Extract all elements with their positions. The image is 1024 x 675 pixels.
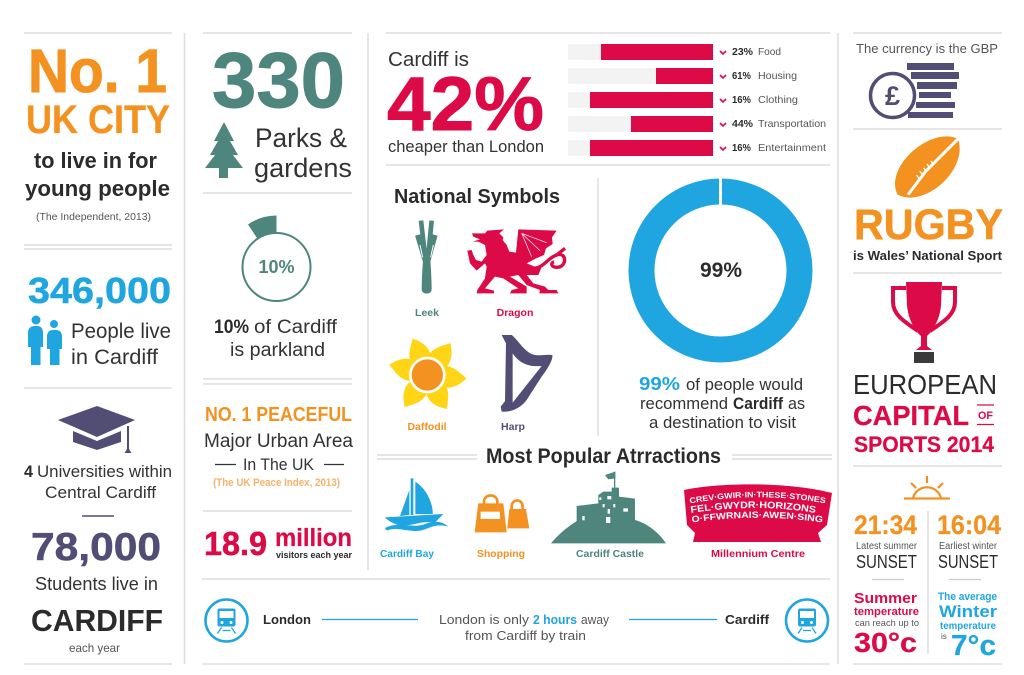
icon: dragon	[467, 229, 565, 293]
icon: pound coins	[870, 63, 959, 118]
bar chart: cost categories: Transportation	[758, 118, 826, 130]
text: is parkland: is parkland	[230, 340, 325, 361]
stat: summer sunset: SUNSET	[856, 552, 917, 572]
bar chart: cost categories: Food	[758, 46, 781, 58]
icon: Millennium Centre banner: CREV·GWIR·IN·THESE·STONES	[690, 492, 826, 503]
stat: winter temperature: Winter	[939, 602, 997, 621]
text: Central Cardiff: Central Cardiff	[45, 483, 156, 502]
number: 42%: 42%	[387, 62, 544, 147]
bar chart: cost categories: 23%	[732, 47, 753, 58]
label: Cardiff Bay: Cardiff Bay	[380, 548, 434, 560]
text: In The UK: In The UK	[243, 455, 315, 474]
heading: Most Popular Atrractions: Most Popular Atrractions	[486, 445, 721, 468]
panel: population	[28, 270, 171, 369]
icon: trophy	[893, 282, 955, 363]
label: Leek: Leek	[415, 307, 439, 319]
bar chart: cost categories: 16%	[732, 143, 751, 154]
panel: universities and students	[24, 406, 172, 655]
text: currency: The currency is the GBP	[856, 41, 998, 56]
panel: attractions	[380, 445, 832, 560]
label: Cardiff Castle: Cardiff Castle	[576, 548, 644, 560]
text: 10% of Cardiff	[214, 317, 338, 338]
stat: winter sunset: SUNSET	[938, 552, 998, 572]
panel: parks	[205, 36, 352, 183]
text: 99% of people would	[639, 374, 803, 394]
label: Shopping: Shopping	[477, 548, 525, 560]
text: young people: young people	[25, 176, 170, 201]
chart: 10 percent ring	[242, 216, 310, 301]
panel: No. 1 UK city	[25, 37, 170, 223]
heading: No. 1: No. 1	[28, 37, 167, 105]
text: recommend Cardiff as	[640, 394, 805, 413]
panel: capital of sports	[853, 282, 997, 457]
icon: Millennium Centre banner	[684, 484, 832, 542]
text: OF	[977, 405, 994, 424]
bar chart: cost categories: 44%	[732, 119, 753, 130]
text: CAPITAL: CAPITAL	[853, 400, 969, 431]
icon: sun	[904, 476, 950, 498]
chart: 10 percent ring: 10%	[258, 257, 295, 277]
stat: summer temperature: Summer	[854, 590, 917, 607]
icon: train Cardiff	[786, 600, 828, 642]
text: People live: People live	[71, 320, 171, 343]
stat: winter sunset: Earliest winter	[939, 541, 998, 552]
panel: national symbols	[387, 186, 565, 433]
stat: winter sunset	[937, 510, 1001, 572]
text: each year: each year	[69, 641, 120, 655]
stat: winter temperature: is	[941, 632, 947, 641]
text: Cardiff is: Cardiff is	[388, 49, 469, 71]
text: recommend Cardiff as: Cardiff	[733, 394, 783, 413]
panel: rugby	[853, 124, 1003, 263]
stat: winter sunset: 16:04	[937, 510, 1001, 540]
label: Millennium Centre: Millennium Centre	[711, 548, 805, 560]
bar chart: cost categories: 61%	[732, 71, 751, 82]
text: national sport: is Wales’ National Sport	[853, 249, 1003, 263]
text: SPORTS 2014: SPORTS 2014	[854, 432, 995, 457]
label: Daffodil: Daffodil	[407, 421, 447, 433]
panel: currency	[856, 41, 998, 118]
panel: recommendation	[639, 176, 805, 432]
text: 99% of people would: 99%	[639, 374, 680, 394]
stat: summer sunset: Latest summer	[856, 541, 918, 552]
icon: boat	[385, 478, 448, 531]
text: train time: 2 hours	[533, 612, 577, 627]
text: Major Urban Area: Major Urban Area	[204, 431, 353, 452]
number: 78,000: 78,000	[31, 526, 161, 569]
number: 330: 330	[212, 36, 345, 124]
bar chart: cost categories: Housing	[758, 70, 797, 82]
text: OF: OF	[978, 410, 993, 422]
bar chart: cost categories	[568, 44, 826, 156]
text: train time	[439, 612, 609, 643]
stat: summer temperature	[854, 590, 919, 658]
text: Parks &: Parks &	[255, 123, 347, 153]
text: in Cardiff: in Cardiff	[71, 346, 158, 369]
bar chart: cost categories: 16%	[732, 95, 751, 106]
text: Students live in: Students live in	[35, 574, 158, 594]
stat: winter temperature: temperature	[940, 620, 996, 632]
panel: cost of living	[387, 44, 826, 156]
text: to live in for: to live in for	[34, 148, 157, 173]
icon: rugby ball	[882, 124, 974, 210]
heading: RUGBY: RUGBY	[854, 201, 1003, 249]
heading: National Symbols: National Symbols	[394, 186, 560, 208]
icon: graduation cap	[58, 406, 135, 453]
icon: shopping bags	[475, 495, 529, 532]
panel: weather	[854, 476, 1001, 662]
icon: daffodil	[387, 334, 467, 414]
icon: Millennium Centre banner: O·FFWRNAIS·AWEN·SING	[692, 512, 822, 522]
text: 4 Universities within: Universities within	[37, 462, 172, 481]
panel: train journey	[206, 600, 828, 643]
label: London: London	[263, 612, 311, 627]
panel: visitors	[204, 524, 352, 562]
bar chart: cost categories: Entertainment	[758, 142, 826, 154]
text: 99% of people would: of people would	[686, 375, 803, 394]
icon: pound coins: £	[885, 81, 900, 111]
text: CARDIFF: CARDIFF	[31, 603, 163, 638]
stat: winter temperature: 7°c	[951, 630, 996, 662]
bar chart: cost categories: Clothing	[758, 94, 798, 106]
number: million: million	[275, 524, 352, 552]
text: gardens: gardens	[254, 153, 352, 183]
stat: summer sunset	[854, 510, 918, 572]
panel: peaceful	[204, 404, 353, 489]
icon: castle	[551, 472, 666, 543]
stat: summer temperature: 30°c	[854, 627, 917, 658]
text: a destination to visit: a destination to visit	[649, 413, 796, 432]
text: 10% of Cardiff: of Cardiff	[254, 317, 338, 338]
panel: parkland	[214, 216, 338, 361]
text: recommend Cardiff as: as	[788, 394, 805, 413]
text: visitors each year: visitors each year	[276, 550, 352, 561]
icon: Millennium Centre banner: FEL·GWYDR·HORIZONS	[690, 501, 816, 513]
icon: tree	[205, 122, 243, 178]
label: Dragon: Dragon	[497, 307, 533, 319]
text: train time: from Cardiff by train	[465, 628, 586, 643]
chart: 99 percent donut: 99%	[700, 259, 742, 282]
icon: harp	[501, 335, 552, 412]
stat: winter temperature: The average	[938, 591, 997, 603]
text: source: (The UK Peace Index, 2013)	[213, 477, 340, 489]
text: train time: away	[581, 612, 609, 627]
chart: 99 percent donut	[642, 176, 800, 350]
number: 18.9: 18.9	[204, 525, 267, 562]
icon: leek	[418, 221, 435, 294]
label: Harp: Harp	[501, 421, 525, 433]
text: source: (The Independent, 2013)	[36, 211, 151, 223]
text: 4 Universities within: 4	[24, 462, 34, 481]
icon: people	[28, 316, 62, 365]
stat: summer temperature: can reach up to	[855, 618, 919, 629]
text: 10% of Cardiff: 10%	[214, 317, 249, 338]
text: train time: London is only	[439, 612, 530, 627]
icon: train London	[206, 600, 248, 642]
stat: summer sunset: 21:34	[854, 510, 917, 540]
label: Cardiff: Cardiff	[725, 612, 770, 627]
text: EUROPEAN: EUROPEAN	[853, 369, 997, 400]
heading: UK CITY: UK CITY	[26, 98, 170, 142]
text: cheaper than London: cheaper than London	[388, 137, 544, 156]
number: 346,000: 346,000	[28, 270, 171, 311]
stat: summer temperature: temperature	[854, 606, 919, 618]
stat: winter temperature	[938, 591, 997, 662]
text: recommend Cardiff as: recommend	[640, 394, 728, 413]
heading: No. 1 peaceful: NO. 1 PEACEFUL	[205, 404, 352, 426]
